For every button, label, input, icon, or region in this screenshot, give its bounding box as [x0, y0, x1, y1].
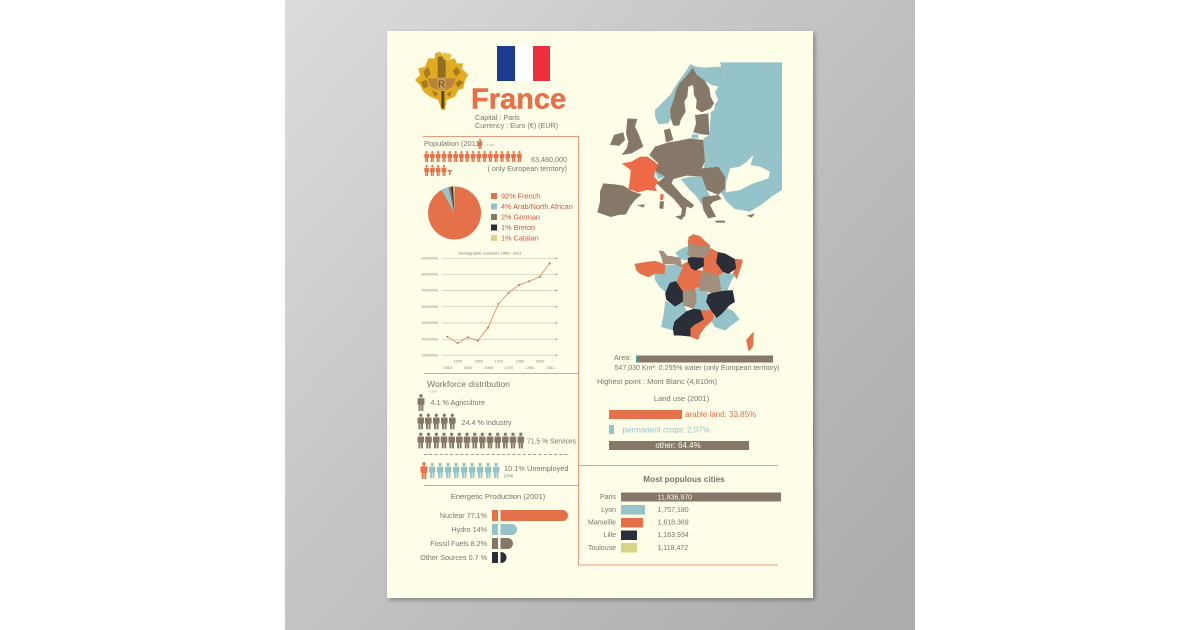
pie chart: ethnic groups: [428, 186, 481, 240]
Switzerland: [655, 172, 666, 179]
industry row: [418, 414, 512, 429]
population legend person: [478, 139, 482, 149]
panel: most populous cities: [588, 475, 781, 552]
poster sheet: [387, 31, 813, 598]
city values: 11,836,970: [658, 494, 692, 502]
line chart: demographic evolution: 1965: [474, 358, 483, 364]
pie legend: 92% French: [501, 192, 540, 200]
energy labels: Fossil Fuels 8.2%: [430, 539, 488, 548]
Norway: [655, 64, 725, 124]
capital and currency: [475, 113, 558, 130]
icon: coat of arms: R: [438, 80, 445, 91]
line chart: demographic evolution: 1990: [526, 365, 535, 370]
line chart: demographic evolution: 55000000: [422, 289, 438, 293]
other land bar: other: 64.4%: [655, 441, 701, 450]
EU members: [597, 68, 755, 223]
line chart: demographic evolution: 1960: [464, 365, 473, 370]
population figure: 63,460,000: [531, 155, 567, 164]
line chart: demographic evolution: 2011: [546, 365, 555, 370]
highest point: Highest point : Mont Blanc (4,810m): [597, 377, 717, 386]
city values: [658, 494, 692, 552]
capital and currency: Capital : Paris: [475, 113, 520, 122]
area block: 547,030 Km²: 0.255% water (only European territory): [614, 363, 780, 372]
area block: Area:: [614, 353, 631, 362]
line chart: demographic evolution: 65000000: [422, 256, 438, 260]
icon: coat of arms: [415, 52, 468, 110]
land use heading: Land use (2001): [654, 394, 710, 403]
city labels: Marseille: [588, 520, 616, 526]
population pictogram: [424, 151, 522, 176]
city bars: [621, 492, 781, 552]
cities heading: Most populous cities: [643, 475, 725, 484]
line chart: demographic evolution: 1968: [484, 365, 493, 370]
panel: energetic production: [420, 492, 568, 563]
Black Sea: [726, 155, 770, 192]
western Balkans: [681, 177, 711, 205]
map: French regions: [635, 235, 753, 351]
line chart: demographic evolution: 1955: [454, 358, 462, 364]
energy labels: Nuclear 77.1%: [440, 511, 488, 520]
agriculture row: 4.1 % Agriculture: [430, 398, 485, 407]
line chart: demographic evolution: 1975: [505, 365, 513, 370]
services row: [418, 433, 576, 448]
line chart: demographic evolution: 40000000: [422, 338, 438, 342]
panel: land use: [609, 394, 756, 450]
agriculture row: [418, 394, 485, 411]
pie legend: [491, 192, 573, 242]
pie legend: 1% Breton: [501, 223, 535, 232]
workforce heading: Workforce distribution: [427, 379, 510, 389]
energy labels: Other Sources 0.7 %: [420, 553, 488, 562]
city labels: Lyon: [601, 507, 616, 514]
energy heading: Energetic Production (2001): [451, 492, 546, 501]
unemployment row: 10.1% Unemployed: [504, 464, 569, 473]
title: France: [471, 84, 566, 116]
permanent crops bar: permanent crops: 2.07%: [622, 426, 710, 434]
line chart: demographic evolution: 2000: [536, 358, 545, 364]
population note: ( only European territory): [488, 164, 567, 173]
background wall: [285, 0, 915, 630]
city values: 1,757,180: [658, 507, 689, 514]
unemployment row: [420, 462, 569, 479]
arable land bar: [609, 410, 756, 419]
arable land bar: arable land: 33.85%: [685, 410, 756, 419]
line chart: demographic evolution: 1970: [495, 358, 504, 364]
city values: 1,618,369: [658, 520, 689, 526]
non-EU Europe: [703, 62, 782, 212]
France highlighted: [622, 157, 664, 200]
services row: 71.5 % Services: [527, 436, 576, 446]
city values: 1,118,472: [658, 545, 688, 552]
population legend note: = 3 Mill.: [484, 143, 495, 147]
pie legend: 2% German: [501, 212, 540, 222]
city labels: Paris: [600, 494, 616, 501]
line chart: demographic evolution: Demographic evolution 1950 - 2011: [458, 250, 522, 256]
panel: population: [424, 139, 567, 176]
line chart: demographic evolution: 60000000: [422, 272, 438, 276]
panel rules: [423, 136, 778, 565]
line chart: demographic evolution: 50000000: [422, 305, 438, 309]
city labels: Toulouse: [588, 545, 616, 552]
pie legend: 4% Arab/North African: [501, 202, 573, 211]
industry row: 24.4 % Industry: [462, 418, 512, 427]
pie legend: 1% Catalan: [501, 234, 539, 242]
city values: 1,163,934: [658, 532, 689, 539]
map: Europe: [597, 62, 782, 223]
icon: French flag: [497, 46, 550, 81]
energy bars: [492, 510, 568, 563]
energy labels: Hydro 14%: [451, 525, 488, 534]
energy labels: [420, 511, 488, 562]
line chart: demographic evolution: 35000000: [422, 354, 438, 358]
line chart: demographic evolution: 45000000: [422, 321, 438, 325]
city labels: Lille: [604, 532, 616, 539]
population heading: Population (2011): [424, 139, 482, 148]
panel: workforce distribution: [418, 379, 576, 479]
unemployment row: (2004): [504, 474, 513, 478]
workforce year: 1999: [430, 390, 437, 394]
city labels: [588, 494, 616, 552]
other land bar: [609, 441, 749, 450]
line chart: demographic evolution: 1980: [516, 358, 525, 364]
capital and currency: Currency : Euro (€) (EUR): [475, 121, 558, 130]
line chart: demographic evolution: [422, 250, 557, 370]
Kaliningrad: [692, 134, 698, 138]
area block: [614, 353, 780, 372]
line chart: demographic evolution: 1950: [443, 365, 453, 370]
